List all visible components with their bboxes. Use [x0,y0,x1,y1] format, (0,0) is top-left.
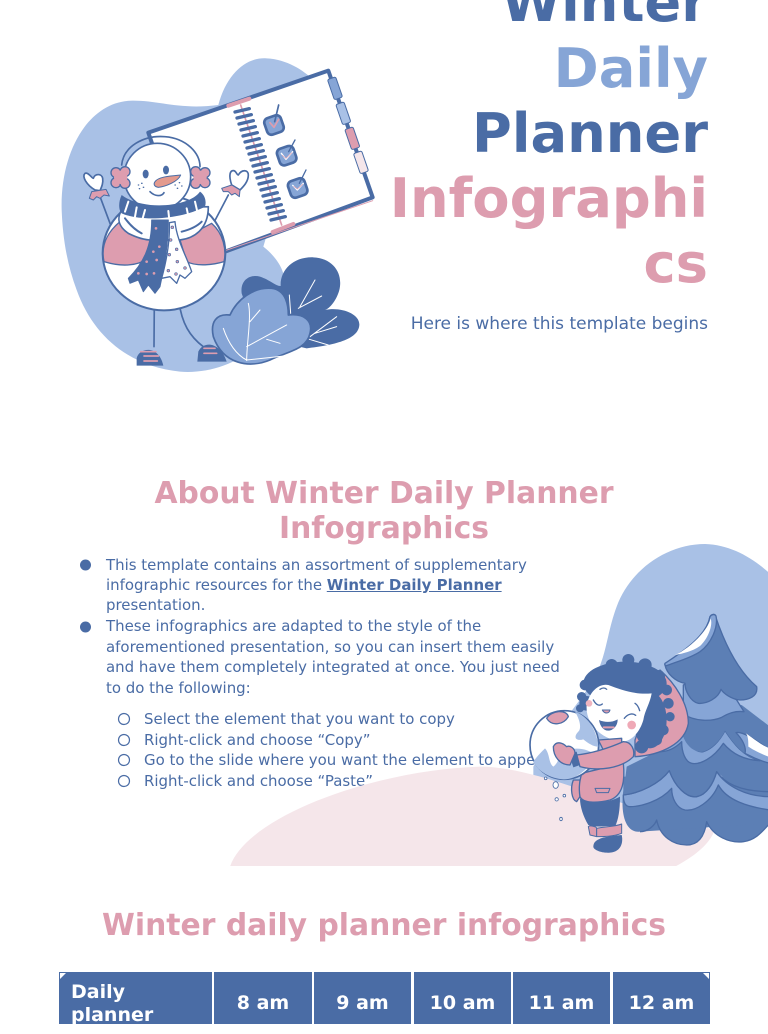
bullet list: Right-click and choose “Copy” [144,731,370,749]
subtitle: Here is where this template begins [411,314,708,334]
legs and boots [580,797,620,827]
snowman [84,137,248,310]
child [530,654,688,853]
bullet list: Go to the slide where you want the element to appear [144,751,551,769]
spiral binding [241,105,282,225]
coat [572,780,580,802]
column: 12 am [613,972,710,1024]
title [390,0,708,295]
column: 11 am [513,972,610,1024]
column: 10 am [414,972,511,1024]
bullet list: This template contains an assortment of supplementary [106,556,527,574]
bullet list [80,556,560,790]
column: 8 am [214,972,312,1024]
tabs [327,77,369,174]
blob background [533,544,768,807]
planner [148,71,373,263]
column: 11 am: 11 am [529,992,594,1014]
snow hill [230,767,713,867]
head [122,137,200,167]
arm [577,742,634,769]
bullet list: These infographics are adapted to the style of the [106,617,481,635]
bullet list: and have them completely integrated at once. You just need [106,658,560,676]
earmuffs [111,167,210,188]
bullet list: Right-click and choose “Paste” [144,772,373,790]
column: daily planner: planner [71,1004,153,1026]
column: 12 am: 12 am [629,992,694,1014]
snow crumbs [544,777,566,821]
column: 9 am [314,972,411,1024]
leaves [212,257,359,364]
title: Daily [554,37,708,100]
checkboxes [263,105,309,199]
heading: about: About Winter Daily Planner [154,476,614,511]
column: daily planner: Daily [71,981,125,1003]
column: daily planner [59,972,212,1024]
bullet list: Select the element that you want to copy [144,710,455,728]
heading: about line two: Infographics [279,511,489,546]
heading: planner infographics: Winter daily planner infographics [102,908,666,943]
body [103,196,225,310]
illustration: child hugging snowball beside pine tree [230,544,768,866]
snowball [598,738,622,750]
blob background [62,58,313,372]
illustration: snowman with planner and leaves [62,58,375,372]
bullet list: presentation. [106,596,205,614]
title: Planner [472,102,708,165]
title: cs [643,232,708,295]
snowman legs and boots [137,302,227,366]
table header [59,972,710,1026]
mittens [84,173,103,191]
column: 8 am: 8 am [237,992,289,1014]
title: Infographi [390,167,708,230]
pine tree [622,614,768,845]
bullet list: infographic resources for the Winter Daily Planner [106,576,502,594]
bullet list: aforementioned presentation, so you can insert them easily [106,638,554,656]
scarf [119,192,206,218]
column: 9 am: 9 am [336,992,389,1014]
column: 10 am: 10 am [430,992,495,1014]
bullet list: to do the following: [106,679,251,697]
